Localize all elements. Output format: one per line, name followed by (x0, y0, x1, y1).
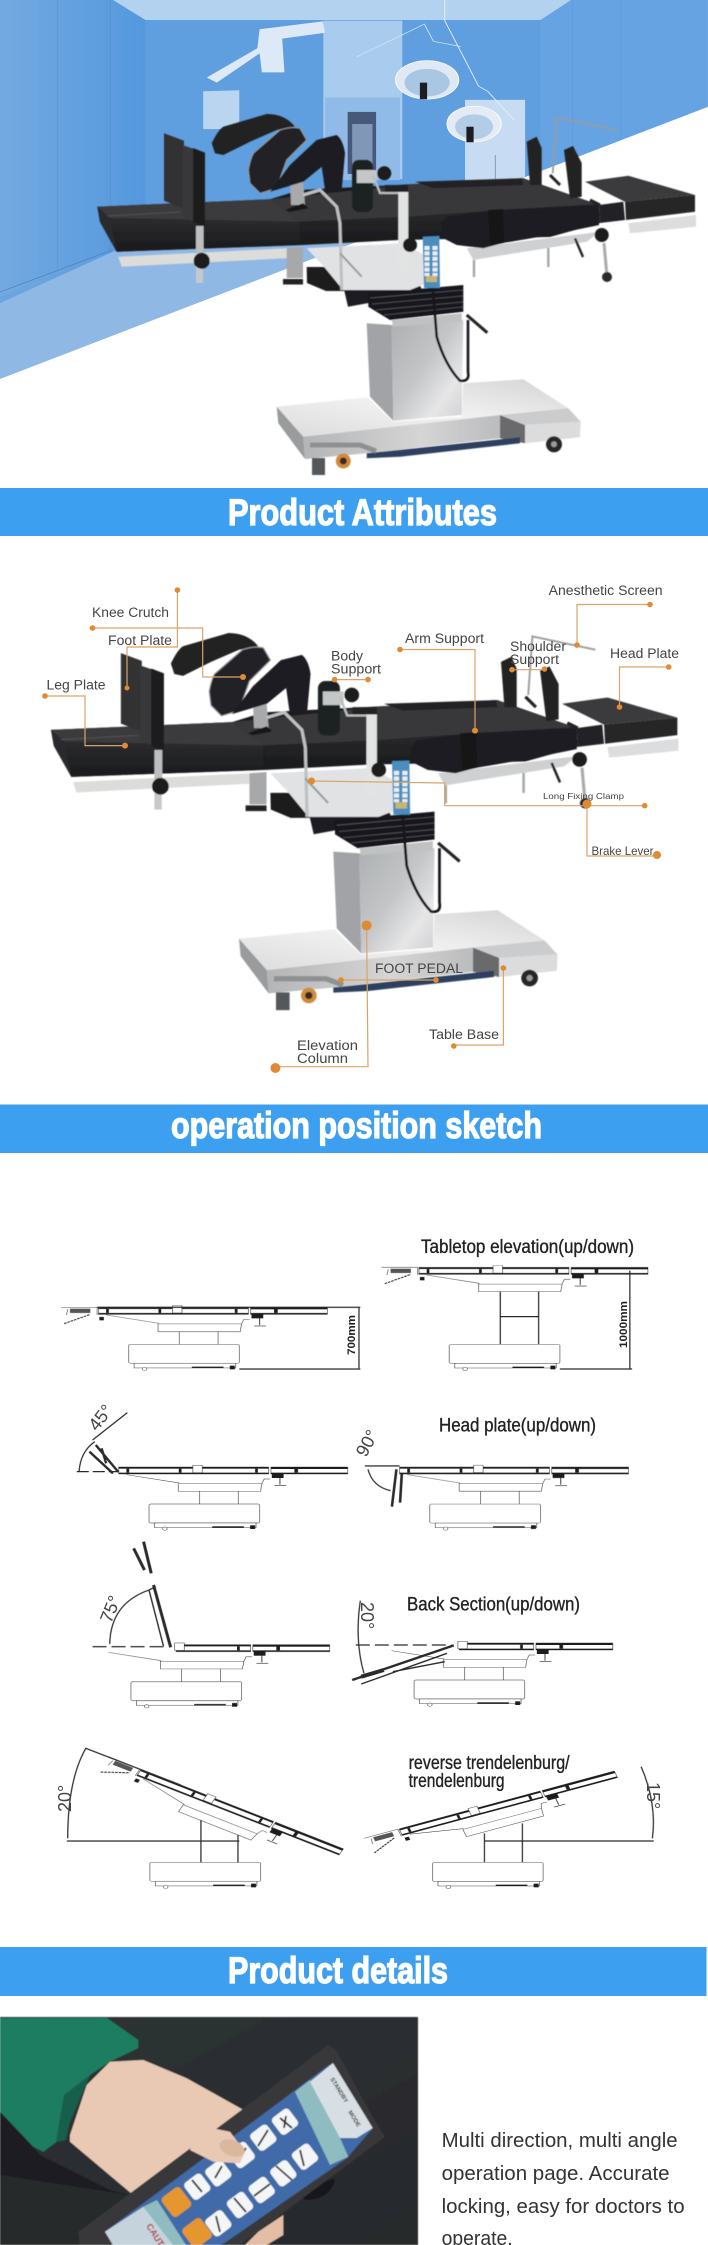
part labels: Body (331, 649, 363, 664)
orange lock buttons (160, 2185, 214, 2245)
sketch captions and dimensions: Back Section(up/down) (407, 1595, 580, 1616)
operating table photo (97, 114, 696, 475)
part labels: FOOT PEDAL (375, 961, 463, 976)
sketch: head plate down 90 degrees (365, 1465, 628, 1530)
thumb over buttons (190, 2125, 245, 2163)
annotated product diagram (42, 583, 679, 1073)
table photo (51, 633, 678, 1010)
sketches: back section and trendelenburg (67, 1542, 654, 1889)
sketch: reverse trendelenburg 15 degrees (363, 1767, 654, 1889)
part labels: Elevation (297, 1038, 358, 1053)
part labels: Anesthetic Screen (549, 583, 663, 598)
part labels: Brake Lever (592, 844, 654, 858)
part labels: Table Base (429, 1027, 499, 1042)
banner: operation position sketch (0, 1104, 708, 1153)
sketch captions and dimensions: 90° (352, 1426, 382, 1460)
remote buttons (183, 2107, 320, 2238)
sketch captions and dimensions: trendelenburg (409, 1771, 505, 1792)
sketch captions and dimensions: Head plate(up/down) (439, 1416, 596, 1437)
sketch captions and dimensions: 20° (357, 1602, 377, 1629)
sketch: low tabletop 700mm (61, 1306, 360, 1371)
sketch captions and dimensions: 1000mm (618, 1301, 630, 1348)
banner: operation position sketch: operation position sketch (171, 1105, 542, 1146)
part labels: Support (510, 652, 559, 667)
sketch: back section up 75 degrees (93, 1542, 330, 1708)
operating room background (0, 0, 708, 379)
description text: Multi direction, multi angle (442, 2130, 678, 2152)
description text (442, 2130, 685, 2245)
sketches: tabletop elevation and head plate (61, 1266, 648, 1530)
description text: operation page. Accurate (442, 2163, 670, 2185)
sketch captions and dimensions: 45° (84, 1401, 117, 1434)
photo: hand holding remote control (0, 2017, 418, 2245)
banner: Product Attributes (0, 488, 708, 536)
remote body (78, 2045, 385, 2245)
part labels: Shoulder (510, 639, 567, 654)
photo: hand holding remote control: STANDBY (328, 2077, 349, 2104)
sleeve (0, 2018, 138, 2152)
hand (70, 2060, 247, 2195)
sketch: trendelenburg 20 degrees (67, 1748, 344, 1889)
sketch: back section down 20 degrees (352, 1601, 613, 1706)
sketch captions and dimensions: reverse trendelenburg/ (409, 1753, 570, 1774)
banner: Product details: Product details (228, 1950, 448, 1991)
banner: Product Attributes: Product Attributes (228, 492, 497, 533)
sketch captions and dimensions: 20° (55, 1785, 75, 1812)
photo: hand holding remote control: MODE (346, 2110, 361, 2128)
button glyphs (192, 2116, 304, 2232)
description text: locking, easy for doctors to (442, 2196, 685, 2218)
finger behind remote (245, 2215, 283, 2245)
part labels: Column (297, 1051, 348, 1066)
sketch captions and dimensions: 700mm (346, 1315, 358, 1355)
sketch: head plate up 45 degrees (77, 1413, 348, 1530)
hero: operating room background and table (0, 0, 708, 476)
leader lines and dots (42, 587, 671, 1073)
part labels: Leg Plate (46, 678, 106, 692)
part labels: Long Fixing Clamp (543, 791, 624, 801)
sketch captions and dimensions (55, 1237, 663, 1812)
part labels: Head Plate (610, 646, 679, 661)
part labels: Arm Support (405, 631, 484, 646)
part labels: Foot Plate (108, 633, 172, 648)
sketch captions and dimensions: 75° (96, 1593, 125, 1625)
sketch: raised tabletop 1000mm (382, 1266, 648, 1371)
banner: Product details (0, 1947, 706, 1996)
part labels: Support (331, 662, 381, 677)
part labels: Knee Crutch (92, 605, 169, 620)
sketch captions and dimensions: 15° (643, 1782, 663, 1809)
part labels (46, 583, 679, 1066)
sketch captions and dimensions: Tabletop elevation(up/down) (421, 1237, 634, 1258)
